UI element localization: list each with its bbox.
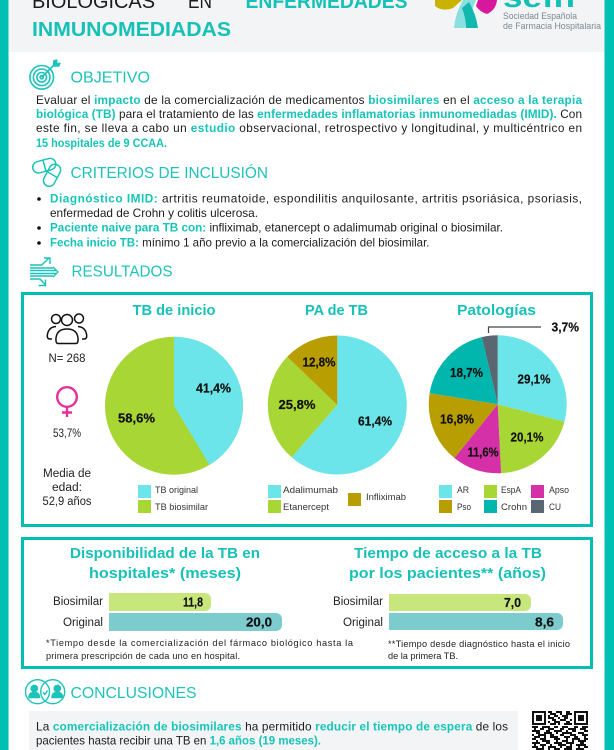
- text: female percent: 53,7%: [53, 428, 81, 440]
- text block: criterios: Diagnóstico IMID: artritis reumatoide, espondilitis anquilosante, artritis psoriásica, psoriasis,: [50, 192, 582, 206]
- text block: conclusion: pacientes hasta recibir una TB en 1,6 años (19 meses).: [36, 734, 321, 748]
- heading: objetivo: OBJETIVO: [70, 70, 150, 86]
- text block: conclusion: La comercialización de biosimilares ha permitido reducir el tiempo de espera de los: [36, 720, 508, 734]
- legend: TB de inicio: [138, 485, 208, 513]
- legend: PA de TB: Adalimumab: [283, 485, 338, 496]
- bar chart: tiempo de acceso: Biosimilar: [333, 596, 383, 608]
- pie chart: TB de inicio: [140, 371, 208, 440]
- panel: disponibilidad y tiempo de acceso: [22, 538, 592, 668]
- pie labels: 20,1%: [510, 430, 544, 444]
- bar chart: tiempo de acceso: 8,6: [535, 614, 554, 630]
- heading: resultados: RESULTADOS: [72, 264, 172, 280]
- title: [32, 0, 408, 41]
- bar chart: disponibilidad: 20,0: [246, 614, 272, 630]
- legend: TB de inicio: TB original: [155, 485, 198, 496]
- heading: conclusiones: CONCLUSIONES: [70, 685, 196, 702]
- pie labels: [278, 354, 392, 428]
- legend: Patologías: Apso: [549, 485, 569, 496]
- footnote: tiempo de acceso: de la primera TB.: [388, 651, 458, 661]
- pie labels: 18,7%: [450, 365, 483, 380]
- text block: criterios: [37, 192, 582, 250]
- text: mean age: [42, 468, 92, 508]
- pie labels: 16,8%: [440, 412, 474, 426]
- QR code: [532, 712, 588, 749]
- header band: [8, 0, 605, 52]
- chart title: TB de inicio: TB de inicio: [132, 302, 216, 319]
- pie chart: PA de TB: [303, 370, 372, 440]
- text block: criterios: enfermedad de Crohn y colitis ulcerosa.: [50, 206, 258, 220]
- legend: PA de TB: [268, 485, 406, 513]
- icon: female: [57, 387, 77, 417]
- logo: SEFH: de Farmacia Hospitalaria: [503, 21, 602, 32]
- legend: Patologías: Pso: [457, 502, 471, 513]
- text block: objetivo: 15 hospitales de 9 CCAA.: [36, 136, 167, 150]
- text: mean age: Media de: [43, 468, 91, 480]
- legend: PA de TB: Infliximab: [366, 492, 406, 503]
- leader line for 3,7%: [488, 327, 541, 333]
- pie labels: [440, 320, 579, 460]
- icon: conclusions: [26, 680, 65, 704]
- icon: pills: [31, 157, 63, 188]
- icon: target: [30, 60, 60, 89]
- bar chart: tiempo de acceso: 7,0: [504, 595, 521, 610]
- text block: objetivo: [36, 93, 582, 150]
- legend: PA de TB: Etanercept: [283, 502, 329, 513]
- bar chart: disponibilidad: [53, 593, 282, 631]
- text: mean age: edad:: [52, 482, 82, 494]
- heading: disponibilidad: [70, 545, 260, 582]
- logo: SEFH: [435, 0, 602, 32]
- pie labels: 12,8%: [302, 354, 336, 370]
- pie labels: 58,6%: [118, 410, 155, 426]
- heading: tiempo de acceso: [349, 545, 546, 582]
- pie labels: 25,8%: [278, 397, 316, 412]
- heading: disponibilidad: Disponibilidad de la TB en: [70, 545, 260, 562]
- text block: objetivo: este fin, se lleva a cabo un estudio observacional, retrospectivo y longitudinal, y multicéntrico en: [36, 121, 582, 135]
- text: N: N= 268: [48, 353, 86, 365]
- bar chart: tiempo de acceso: Original: [343, 617, 383, 629]
- heading: criterios: CRITERIOS DE INCLUSIÓN: [70, 163, 268, 182]
- pie labels: 3,7%: [552, 320, 579, 334]
- text: mean age: 52,9 años: [42, 496, 92, 508]
- footnote: disponibilidad: [46, 638, 354, 661]
- logo: SEFH: Sociedad Española: [503, 11, 578, 22]
- legend: Patologías: Crohn: [501, 502, 527, 513]
- heading: tiempo de acceso: por los pacientes** (años): [349, 565, 546, 582]
- pie labels: 11,6%: [468, 444, 499, 460]
- text block: criterios: Paciente naive para TB con: infliximab, etanercept o adalimumab original o biosimilar.: [50, 220, 503, 234]
- legend: Patologías: CU: [549, 502, 561, 513]
- icon: arrows: [30, 258, 58, 286]
- legend: TB de inicio: TB biosimilar: [155, 502, 208, 513]
- chart title: PA de TB: PA de TB: [305, 302, 368, 319]
- footnote: disponibilidad: *Tiempo desde la comercialización del fármaco biológico hasta la: [46, 638, 354, 648]
- bar chart: disponibilidad: Original: [63, 617, 103, 629]
- bar chart: disponibilidad: Biosimilar: [53, 596, 103, 608]
- bar chart: disponibilidad: 11,8: [183, 594, 203, 610]
- footnote: tiempo de acceso: [388, 639, 570, 661]
- pie chart: Patologías: [463, 370, 532, 439]
- pie labels: 41,4%: [196, 380, 231, 396]
- pie labels: [118, 380, 231, 426]
- legend: Patologías: [439, 485, 569, 513]
- panel: resultados: [22, 294, 592, 526]
- heading: tiempo de acceso: Tiempo de acceso a la TB: [354, 545, 542, 562]
- panel: conclusion text: [29, 711, 518, 750]
- text block: conclusion: [36, 720, 508, 748]
- pie labels: 29,1%: [518, 372, 551, 386]
- text block: objetivo: biológica (TB) para el tratamiento de las enfermedades inflamatorias inmunomediadas (IMID). Con: [36, 107, 582, 121]
- icon: people: [47, 314, 87, 344]
- heading: disponibilidad: hospitales* (meses): [89, 565, 241, 582]
- footnote: tiempo de acceso: **Tiempo desde diagnóstico hasta el inicio: [388, 639, 570, 649]
- text block: criterios: Fecha inicio TB: mínimo 1 año previo a la comercialización del biosimilar.: [50, 236, 430, 250]
- pie labels: 61,4%: [358, 414, 392, 428]
- legend: Patologías: EspA: [501, 485, 522, 496]
- title: INMUNOMEDIADAS: [32, 19, 231, 41]
- footnote: disponibilidad: primera prescripción de cada uno en hospital.: [46, 651, 240, 661]
- chart title: Patologías: Patologías: [457, 302, 536, 319]
- bar chart: tiempo de acceso: [333, 594, 563, 630]
- text block: objetivo: Evaluar el impacto de la comercialización de medicamentos biosimilares en el acceso a la terapia: [36, 93, 582, 107]
- legend: Patologías: AR: [457, 485, 469, 496]
